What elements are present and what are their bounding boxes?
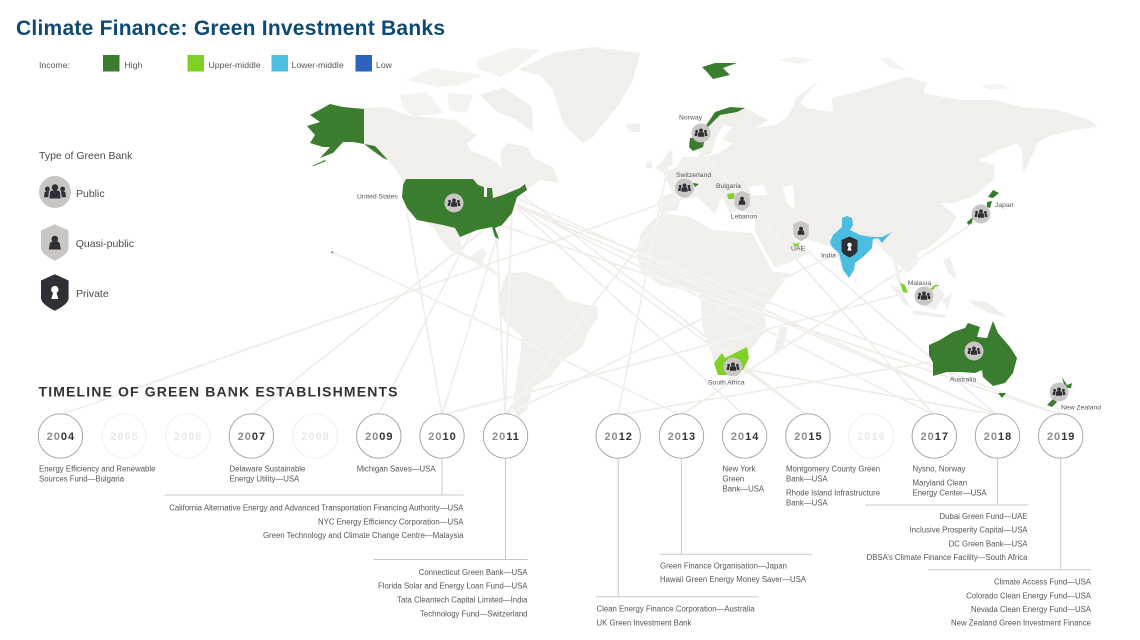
timeline year: 2005: 2005	[110, 431, 139, 443]
timeline year: 2014: Bank—USA	[722, 485, 765, 494]
timeline year: 2010: 2010	[428, 431, 457, 443]
timeline year: 2008	[293, 414, 337, 458]
timeline year: 2010: California Alternative Energy and Advanced Transportation Financing Authority—USA	[169, 503, 464, 512]
timeline year: 2008: 2008	[301, 431, 330, 443]
timeline year: 2018	[865, 414, 1028, 562]
marker: South Africa public	[724, 358, 742, 376]
timeline year: 2017: 2017	[921, 431, 949, 443]
marker: Switzerland public	[675, 178, 694, 198]
timeline year: 2011: Florida Solar and Energy Loan Fund—USA	[378, 582, 528, 591]
high income countries	[307, 63, 1072, 407]
lower-middle income: India	[830, 216, 892, 278]
timeline year: 2013: Hawaii Green Energy Money Saver—USA	[660, 575, 807, 584]
timeline year: 2009	[357, 414, 436, 474]
timeline year: 2007	[229, 414, 305, 484]
timeline year: 2011: Tata Cleantech Capital Limited—India	[397, 596, 528, 605]
timeline year: 2013	[659, 414, 812, 584]
income legend: Low	[376, 60, 393, 70]
timeline year: 2011: 2011	[492, 431, 520, 443]
timeline year: 2019: Climate Access Fund—USA	[994, 578, 1092, 587]
timeline year: 2015: Montgomery County Green	[786, 465, 880, 474]
timeline year: 2011	[374, 414, 528, 618]
country labels: Australia	[950, 376, 976, 384]
timeline year: 2019: Colorado Clean Energy Fund—USA	[966, 591, 1092, 600]
timeline year: 2010: Green Technology and Climate Change Centre—Malaysia	[263, 531, 464, 540]
timeline year: 2014: Green	[722, 475, 744, 484]
bank type legend: Private	[76, 288, 109, 300]
timeline year: 2014: 2014	[731, 431, 759, 443]
timeline year: 2012: UK Green Investment Bank	[596, 618, 692, 627]
marker: Malaysia public	[914, 286, 934, 306]
country labels: Malasia	[908, 280, 931, 287]
marker: Norway public	[692, 124, 710, 142]
connector lines from countries to timeline	[60, 150, 1060, 415]
timeline year: 2012: 2012	[604, 431, 633, 443]
marker: United States public	[444, 194, 464, 212]
timeline year: 2019	[928, 414, 1092, 628]
timeline year: 2013: Green Finance Organisation—Japan	[660, 561, 787, 570]
country labels: Norway	[679, 114, 703, 122]
timeline year: 2010: NYC Energy Efficiency Corporation—USA	[318, 517, 464, 526]
timeline heading: TIMELINE OF GREEN BANK ESTABLISHMENTS	[38, 384, 398, 400]
timeline year: 2019: 2019	[1047, 431, 1075, 443]
timeline year: 2007: Delaware Sustainable	[230, 465, 305, 474]
income legend: Income:	[39, 60, 70, 70]
timeline year: 2013: 2013	[668, 431, 696, 443]
timeline year: 2014: New York	[722, 465, 756, 474]
marker: Australia public	[964, 342, 984, 360]
world map base	[364, 47, 1097, 416]
timeline year: 2017: Maryland Clean	[912, 478, 967, 487]
country labels: Switzerland	[676, 172, 711, 179]
marker: New Zealand public	[1050, 382, 1068, 402]
country labels: UAE	[791, 246, 805, 252]
timeline year: 2015: 2015	[794, 431, 823, 443]
timeline year: 2018: 2018	[984, 431, 1012, 443]
income legend: Upper-middle	[208, 60, 261, 70]
timeline year: 2004	[38, 414, 155, 484]
marker: UAE quasi-public	[793, 221, 809, 241]
timeline year: 2011: Connecticut Green Bank—USA	[419, 568, 528, 577]
timeline year: 2017: Nysno, Norway	[912, 465, 965, 474]
timeline year: 2007: Energy Utility—USA	[230, 475, 300, 484]
timeline year: 2019: Nevada Clean Energy Fund—USA	[971, 605, 1092, 614]
timeline year: 2015: Bank—USA	[786, 498, 828, 507]
timeline year: 2004: 2004	[47, 431, 75, 443]
country labels	[357, 114, 1101, 412]
bank type legend: Quasi-public	[76, 238, 134, 250]
timeline year: 2010	[165, 414, 464, 540]
timeline year: 2006: 2006	[174, 431, 202, 443]
timeline year: 2018: Inclusive Prosperity Capital—USA	[910, 526, 1028, 535]
country labels: New Zealand	[1061, 404, 1101, 412]
timeline year: 2017	[912, 414, 987, 497]
timeline year: 2014	[722, 414, 767, 494]
timeline year: 2009: 2009	[365, 431, 394, 443]
country labels: Japan	[995, 202, 1014, 209]
upper-middle income countries	[714, 193, 940, 375]
title: Climate Finance: Green Investment Banks	[16, 17, 445, 40]
timeline year: 2005	[102, 414, 146, 458]
bank type legend: Type of Green Bank	[39, 150, 133, 162]
timeline year: 2016	[849, 414, 893, 458]
timeline year: 2012: Clean Energy Finance Corporation—Australia	[596, 605, 755, 614]
timeline year: 2004: Sources Fund—Bulgaria	[39, 475, 125, 484]
country labels: United States	[357, 194, 398, 200]
income legend: Lower-middle	[292, 60, 344, 70]
timeline year: 2007: 2007	[238, 431, 266, 443]
timeline year: 2006	[166, 414, 210, 458]
timeline year: 2015: Bank—USA	[786, 475, 828, 484]
timeline year: 2015: Rhode Island Infrastructure	[786, 488, 880, 497]
marker: India private	[841, 236, 858, 258]
marker: Bulgaria quasi-public	[734, 191, 750, 211]
marker: Japan public	[972, 204, 990, 224]
timeline year: 2012	[596, 414, 759, 627]
timeline year: 2015	[786, 414, 880, 507]
timeline year: 2016: 2016	[857, 431, 886, 443]
timeline year: 2011: Technology Fund—Switzerland	[420, 609, 528, 618]
timeline year: 2017: Energy Center—USA	[912, 488, 987, 497]
timeline year: 2004: Energy Efficiency and Renewable	[39, 465, 155, 474]
timeline year: 2018: Dubai Green Fund—UAE	[940, 512, 1028, 521]
country labels: Bulgaria	[716, 183, 741, 190]
timeline year: 2018: DC Green Bank—USA	[949, 539, 1028, 548]
country labels: Lebanon	[731, 214, 757, 220]
timeline year: 2009: Michigan Saves—USA	[357, 465, 436, 474]
bank type legend	[39, 150, 134, 311]
timeline year: 2019: New Zealand Green Investment Finance	[951, 619, 1091, 628]
income legend	[39, 55, 393, 72]
country labels: South Africa	[708, 380, 745, 386]
bank type legend: Public	[76, 188, 105, 200]
country labels: India	[821, 252, 836, 260]
timeline year: 2018: DBSA’s Climate Finance Facility—South Africa	[867, 553, 1028, 562]
income legend: High	[124, 60, 143, 70]
